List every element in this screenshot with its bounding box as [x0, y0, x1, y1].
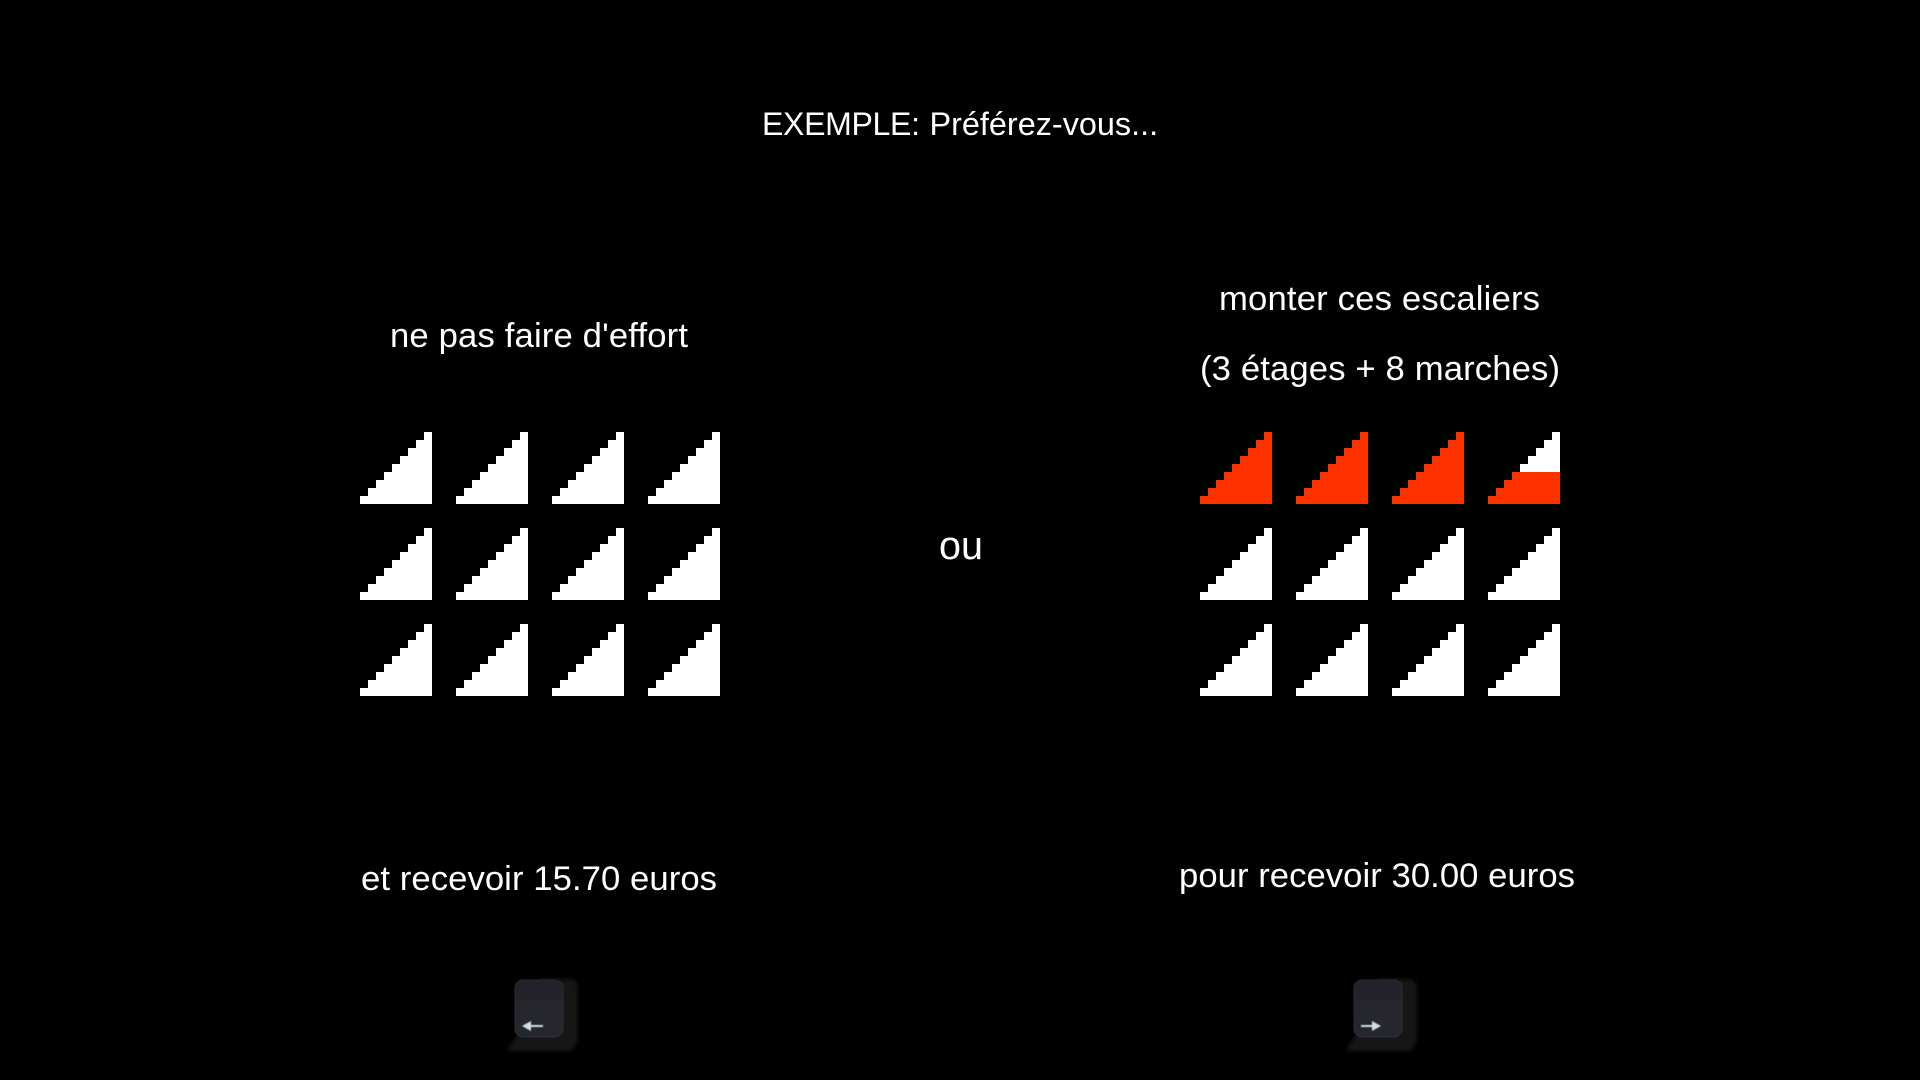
- icon: right arrow key: [1345, 979, 1417, 1051]
- title: Préférez-vous...: [930, 106, 1158, 142]
- heading: right option: (3 étages + 8 marches): [1200, 350, 1560, 388]
- stair grid: left: [360, 432, 720, 696]
- icon: left arrow key: [506, 979, 578, 1051]
- heading: right option: [1200, 280, 1560, 388]
- title: EXEMPLE:: [762, 106, 920, 142]
- right reward text: pour recevoir 30.00 euros: [1179, 857, 1575, 895]
- separator word: ou: ou: [939, 524, 983, 568]
- heading: right option: monter ces escaliers: [1219, 280, 1540, 318]
- title: [762, 106, 1158, 142]
- left reward text: et recevoir 15.70 euros: [361, 860, 717, 898]
- stair grid: right, with climbed floors in red: [1200, 432, 1560, 696]
- heading: left option: ne pas faire d'effort: [390, 317, 688, 355]
